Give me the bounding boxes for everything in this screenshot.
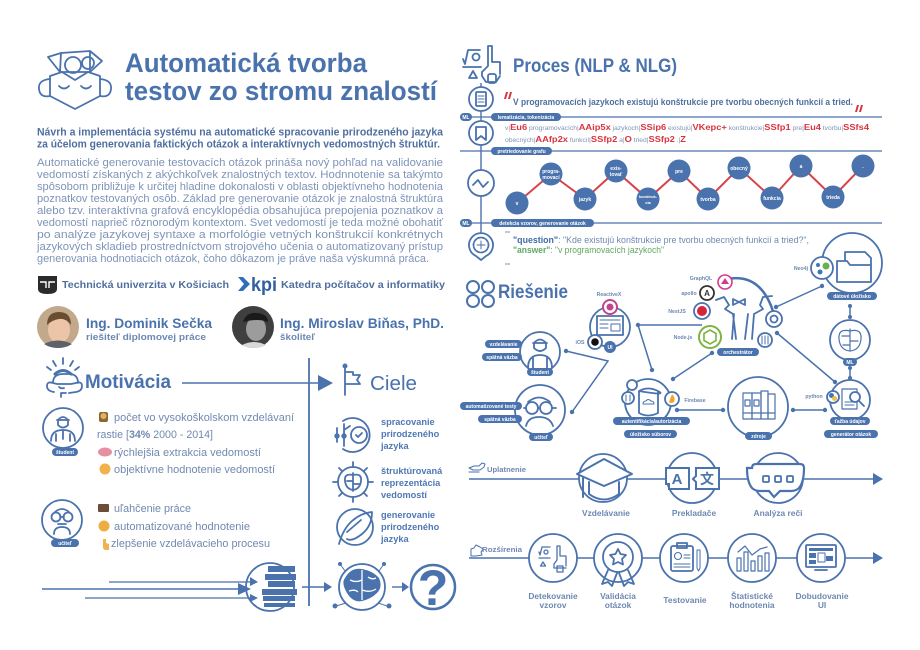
goal: structured knowledge representation: reprezentácia — [381, 478, 441, 488]
heading: Motivácia: Motivácia — [85, 372, 171, 393]
node: orchestrator: A — [704, 289, 710, 298]
node: question generator: generátor otázok — [831, 432, 871, 438]
node: authentication and storage: úložisko súborov — [630, 432, 671, 438]
node: ML — [830, 320, 870, 366]
generated question and answer — [505, 232, 809, 264]
word graph: konštruk- — [639, 194, 658, 199]
icon: document — [469, 87, 493, 111]
morphological tags — [505, 122, 869, 144]
icon: graph line — [468, 170, 494, 196]
node: orchestrator: Node.js — [674, 335, 692, 341]
icon: brain — [469, 233, 493, 260]
person: Miroslav Biňas — [232, 306, 444, 348]
word graph: funkcia — [763, 196, 781, 202]
logo: KPI department: Katedra počítačov a informatiky — [281, 280, 445, 291]
node: UI: ReactiveX — [597, 292, 622, 298]
word graph: pre — [675, 169, 683, 175]
extension: testing — [660, 534, 708, 605]
node: orchestrator: GraphQL — [690, 276, 713, 282]
application: translators: A — [672, 471, 683, 488]
logo: KPI department: kpi — [251, 275, 277, 296]
goal: natural language processing: prirodzeného — [381, 429, 440, 439]
node: student: vzdelávanie — [489, 342, 518, 348]
node: orchestrator: orchestrátor — [723, 350, 753, 356]
node: authentication and storage: Firebase — [684, 398, 706, 404]
node: authentication and storage: autentifikácia/autorizácia — [622, 419, 681, 425]
abstract text block: vedomostí získaných z akýchkoľvek znalostných textov. Hodnnotenie sa takýmto — [37, 169, 443, 181]
abstract text block — [36, 157, 444, 265]
extensions heading: Rozšírenia — [482, 545, 523, 554]
heading: Ciele: Ciele — [370, 373, 417, 395]
icon: neural brain — [332, 562, 392, 610]
extension: question validation — [594, 534, 642, 610]
applications arrow — [469, 473, 883, 485]
connector endpoints — [564, 284, 852, 414]
heading: Proces: Proces (NLP & NLG) — [513, 56, 677, 77]
quote sentence: V programovacích jazykoch existujú konštrukcie pre tvorbu obecných funkcií a tried. — [513, 97, 853, 108]
goal: natural language processing — [335, 417, 440, 452]
icon: student — [43, 408, 83, 456]
node: UI: UI — [608, 345, 613, 351]
quote sentence — [504, 92, 863, 112]
goal: structured knowledge representation — [333, 462, 443, 502]
icon: thinking head — [47, 358, 82, 397]
motivation list: teacher: zlepšenie vzdelávacieho procesu — [111, 538, 270, 550]
label: ML and lemmatization — [460, 113, 561, 121]
word graph: tovať — [610, 172, 623, 178]
node: student: spätná väzba — [486, 355, 518, 361]
extension: testing: Testovanie — [663, 595, 707, 605]
arrow: books to brain — [302, 582, 332, 592]
extension: statistics — [728, 534, 776, 610]
application: speech analysis: Analýza reči — [754, 508, 802, 518]
node: question generator — [805, 380, 878, 438]
application: translators: Prekladače — [672, 508, 716, 518]
application: education: Vzdelávanie — [582, 508, 630, 518]
node: sources: zdroje — [751, 434, 766, 440]
title — [125, 48, 438, 106]
word graph: tvorba — [700, 197, 716, 203]
person: Miroslav Biňas: Ing. Miroslav Biňas, PhD. — [280, 315, 444, 331]
generated question and answer: "answer": "v programovacích jazykoch" — [513, 245, 664, 255]
node: authentication and storage — [613, 379, 706, 438]
label: ML and detection — [460, 219, 594, 227]
icon: solution nodes — [467, 281, 494, 307]
label: graph rewrite — [491, 147, 552, 155]
person: Dominik Sečka: riešiteľ diplomovej práce — [86, 332, 206, 342]
goal: natural language processing: jazyka — [380, 441, 409, 451]
connectors: architecture — [566, 286, 850, 412]
abstract text block: alebo tzv. interaktívna grafová encyklopédia obsahujúca prepojenia poznatkov a — [37, 205, 444, 217]
logo: Technická univerzita — [38, 276, 229, 294]
subtitle — [37, 126, 444, 150]
label: ML and detection: detekcia vzorov, generovanie otázok — [499, 221, 586, 227]
arrow: motivation to goals — [182, 375, 333, 391]
title: testov zo stromu znalostí — [125, 76, 438, 106]
word graph: . — [862, 164, 864, 170]
icon: question mark: ? — [418, 560, 448, 616]
morphological tags: v|Eu6 programovacích| AAip5x jazykoch| SSip6 existujú|VKepc+ konštrukcie| SSfp1 pre|Eu4 tvorbu|SSfs4 — [505, 122, 869, 132]
goal: natural language generation — [337, 509, 440, 545]
icon: teacher — [42, 500, 82, 547]
icon: teacher: učiteľ — [58, 541, 72, 547]
motivation list: student: rastie [34% 2000 - 2014] — [97, 429, 213, 441]
node: teacher: učiteľ — [534, 435, 548, 441]
divider: vertical line — [308, 358, 310, 606]
node: data storage — [794, 233, 882, 300]
node: orchestrator: NestJS — [668, 309, 686, 315]
extension: pattern detection — [528, 534, 578, 610]
goal: natural language generation: jazyka — [380, 534, 409, 544]
icon: flag — [343, 364, 360, 395]
node: teacher: spätná väzba — [484, 417, 516, 423]
extension: pattern detection: vzorov — [540, 600, 567, 610]
node: student — [482, 332, 560, 376]
abstract text block: spôsobom približuje k určitej hladine dokonalosti v oblasti objektívneho hodnotenia — [37, 181, 444, 193]
node: teacher: automatizované testy — [466, 404, 517, 410]
node: data storage: dátové úložisko — [833, 294, 871, 300]
abstract text block: vedomostí naprieč rôznorodým kontextom. Svet vedomostí je teda možné obohatiť — [37, 217, 444, 229]
application: translators: 文 — [700, 471, 714, 487]
label: graph rewrite: pretriedovanie grafu — [497, 149, 546, 155]
icon: process formula and hand — [463, 46, 500, 83]
application: education — [577, 454, 632, 518]
subtitle: Návrh a implementácia systému na automatické spracovanie prirodzeného jazyka — [37, 126, 444, 138]
label: ML and lemmatization: ML — [462, 115, 470, 121]
word graph: movací — [542, 175, 560, 181]
motivation list: student — [97, 412, 294, 476]
logo: KPI department — [238, 275, 445, 296]
word graph: v — [516, 201, 519, 207]
abstract text block: Automatické generovanie testovacích otázok prináša nový pohľad na validovanie — [37, 157, 443, 169]
node: UI — [576, 292, 630, 353]
motivation list: teacher: uľahčenie práce — [114, 503, 191, 515]
process rows — [460, 117, 882, 223]
subtitle: za účelom generovania faktických otázok a interaktívnych vedomostných štruktúr. — [37, 138, 440, 150]
extensions heading — [471, 545, 523, 556]
person: Miroslav Biňas: školiteľ — [280, 332, 316, 342]
label: ML and detection: ML — [462, 221, 470, 227]
goal: structured knowledge representation: vedomostí — [381, 490, 427, 500]
extension: question validation: otázok — [605, 600, 632, 610]
generated question and answer: "question": "Kde existujú konštrukcie pre tvorbu obecných funkcií a tried?", — [513, 235, 809, 245]
word graph: cia — [645, 200, 652, 205]
extension: statistics: hodnotenia — [729, 600, 775, 610]
extension: UI completion: UI — [818, 600, 826, 610]
abstract text block: po analýze jazykovej syntaxe a morfológie vetných konštrukcií konkrétnych — [37, 229, 443, 241]
application: translators — [666, 453, 719, 518]
node: question generator: python — [805, 394, 823, 400]
morphological tags: obecných| AAfp2x funkcií|SSfp2 a|O tried|SSfp2 .|Z — [505, 134, 686, 144]
heading: Riešenie: Riešenie — [498, 282, 568, 303]
word graph — [506, 154, 874, 214]
extension: UI completion — [795, 534, 849, 610]
goal: natural language generation: prirodzeného — [381, 522, 440, 532]
logo: Technická univerzita: Technická univerzita v Košiciach — [62, 280, 229, 291]
icon: student: študent — [56, 450, 74, 456]
word graph: jazyk — [578, 197, 591, 203]
goal: natural language processing: spracovanie — [381, 417, 435, 427]
icon: books with incoming arrows — [42, 563, 297, 611]
node: data storage: Neo4j — [794, 266, 809, 272]
node: teacher — [460, 385, 565, 441]
applications heading — [469, 463, 526, 474]
node: question generator: ťažba údajov — [834, 419, 866, 425]
motivation list: teacher — [98, 503, 270, 550]
arrow: brain to question — [392, 582, 409, 592]
application: speech analysis — [747, 453, 804, 518]
abstract text block: jazykových skladieb prostredníctvom strojového učenia o automatizovaný prístup — [36, 241, 443, 253]
icon: head with knowledge graph — [39, 51, 111, 109]
extension: UI completion: Dobudovanie — [795, 591, 849, 601]
node: ML: ML — [846, 360, 854, 366]
motivation list: student: počet vo vysokoškolskom vzdelávaní — [114, 412, 294, 424]
node: sources — [728, 377, 788, 440]
extensions arrow — [469, 552, 883, 564]
node: orchestrator: apollo — [681, 291, 697, 297]
node: student: študent — [531, 370, 549, 376]
person: Dominik Sečka: Ing. Dominik Sečka — [86, 315, 212, 331]
goal: structured knowledge representation: štruktúrovaná — [381, 466, 443, 476]
word graph: trieda — [826, 195, 840, 201]
word graph: a — [800, 164, 803, 170]
word graph: exis- — [610, 166, 622, 172]
word graph: progra- — [542, 169, 560, 175]
abstract text block: generovania hodnotiacich otázok, čoho dôkazom je práve naša výskumná práca. — [37, 253, 429, 265]
title: Automatická tvorba — [125, 48, 368, 78]
icon: bookmark — [469, 121, 493, 145]
goal: natural language generation: generovanie — [381, 510, 435, 520]
motivation list: student: rýchlejšia extrakcia vedomostí — [114, 447, 261, 459]
motivation list: student: objektívne hodnotenie vedomostí — [114, 464, 275, 476]
extension: statistics: Štatistické — [731, 590, 773, 601]
applications heading: Uplatnenie — [487, 465, 526, 474]
motivation list: teacher: automatizované hodnotenie — [114, 521, 250, 533]
process timeline spine — [480, 83, 482, 255]
node: UI: iOS — [576, 340, 585, 346]
node: orchestrator — [668, 275, 782, 356]
extension: question validation: Validácia — [600, 591, 636, 601]
icon: question mark — [411, 560, 455, 616]
person: Dominik Sečka — [37, 306, 212, 348]
label: ML and lemmatization: lematizácia, tokenizácia — [498, 115, 554, 121]
extension: pattern detection: Detekovanie — [528, 591, 578, 601]
abstract text block: poznatkov testovaných osôb. Základ pre generovanie otázok je znalostná štruktúra — [37, 193, 444, 205]
word graph: obecný — [730, 166, 748, 172]
